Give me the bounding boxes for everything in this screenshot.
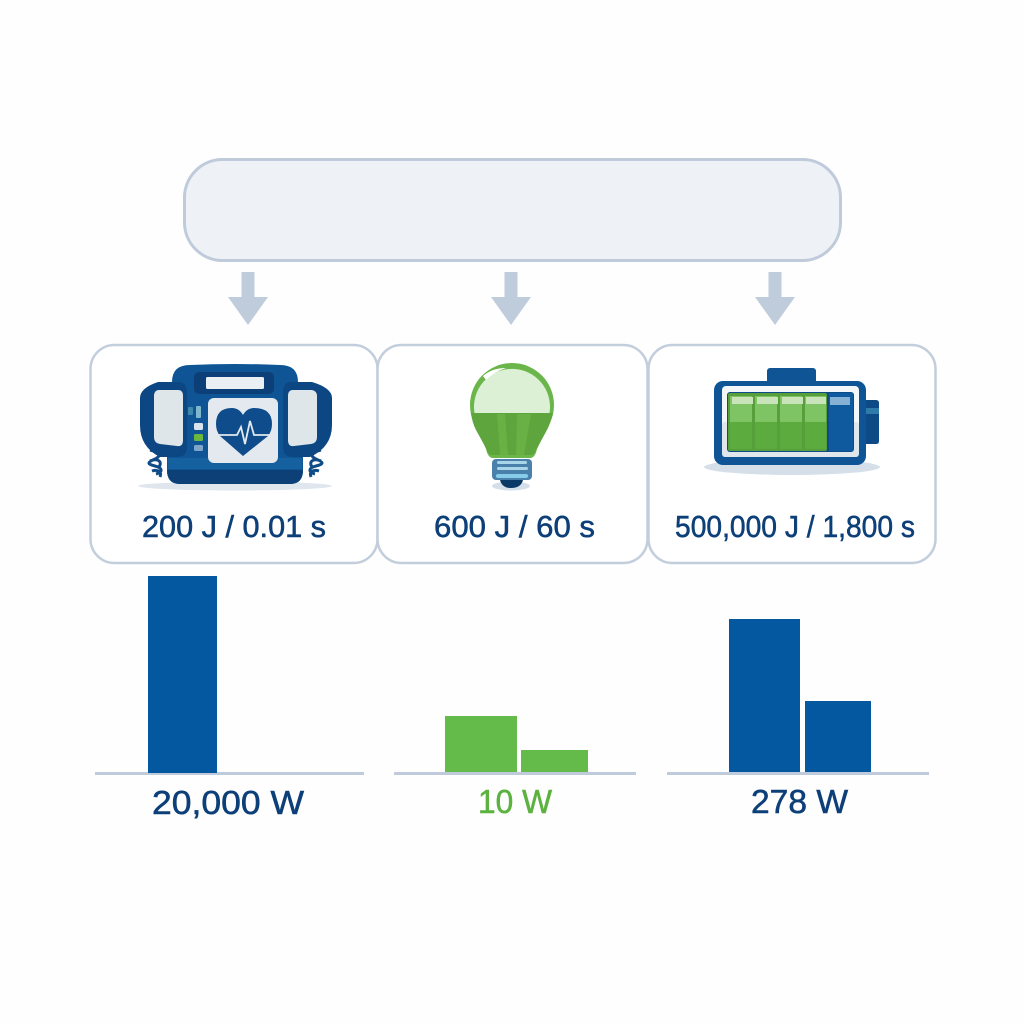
label: battery energy and time: 500,000 J / 1,800 s [675, 509, 915, 544]
bar chart: battery power [667, 619, 929, 820]
value: 278 W: 278 W [751, 783, 849, 820]
bar chart: defibrillator power [95, 576, 364, 821]
panel: defibrillator [90, 345, 378, 563]
value: 10 W: 10 W [478, 783, 553, 820]
value: 20,000 W: 20,000 W [152, 784, 305, 821]
arrow: to battery [755, 272, 795, 325]
title banner (empty) [184, 160, 840, 260]
label: defibrillator energy and time: 200 J / 0.01 s [142, 509, 326, 544]
icon: battery [704, 368, 880, 475]
arrow: to light bulb [491, 272, 531, 325]
icon: defibrillator [138, 364, 332, 490]
panel: light bulb [378, 345, 648, 563]
bar chart: bulb power [394, 716, 636, 820]
arrow: to defibrillator [228, 272, 268, 325]
label: bulb energy and time: 600 J / 60 s [434, 509, 595, 544]
icon: light bulb [470, 363, 554, 490]
panel: battery [648, 345, 936, 563]
